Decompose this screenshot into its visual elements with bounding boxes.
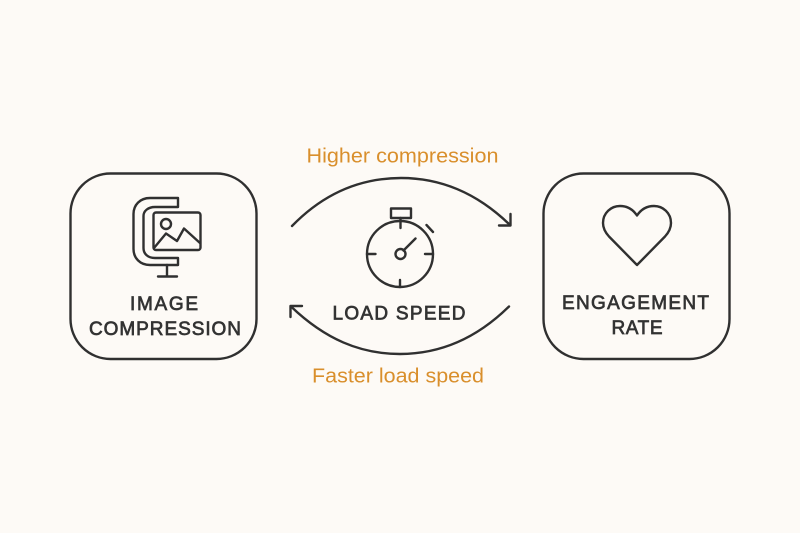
label: image compression: COMPRESSION [89, 319, 241, 340]
icon: clamp compressing an image [134, 198, 200, 276]
label: engagement rate: RATE [612, 318, 662, 339]
icon: heart [603, 206, 671, 265]
arrow: top arc to engagement [292, 178, 510, 226]
panel: image compression [70, 174, 256, 359]
label: engagement rate: ENGAGEMENT [562, 293, 709, 314]
label: load speed: LOAD SPEED [332, 304, 466, 324]
caption: higher compression: Higher compression [306, 146, 498, 168]
panel: engagement rate [544, 174, 730, 359]
arrow: bottom arc back to compression [290, 306, 509, 354]
label: image compression [89, 294, 241, 340]
caption: faster load speed: Faster load speed [312, 366, 484, 388]
icon: stopwatch [367, 208, 433, 287]
label: image compression: IMAGE [130, 294, 198, 315]
label: engagement rate [562, 293, 709, 339]
